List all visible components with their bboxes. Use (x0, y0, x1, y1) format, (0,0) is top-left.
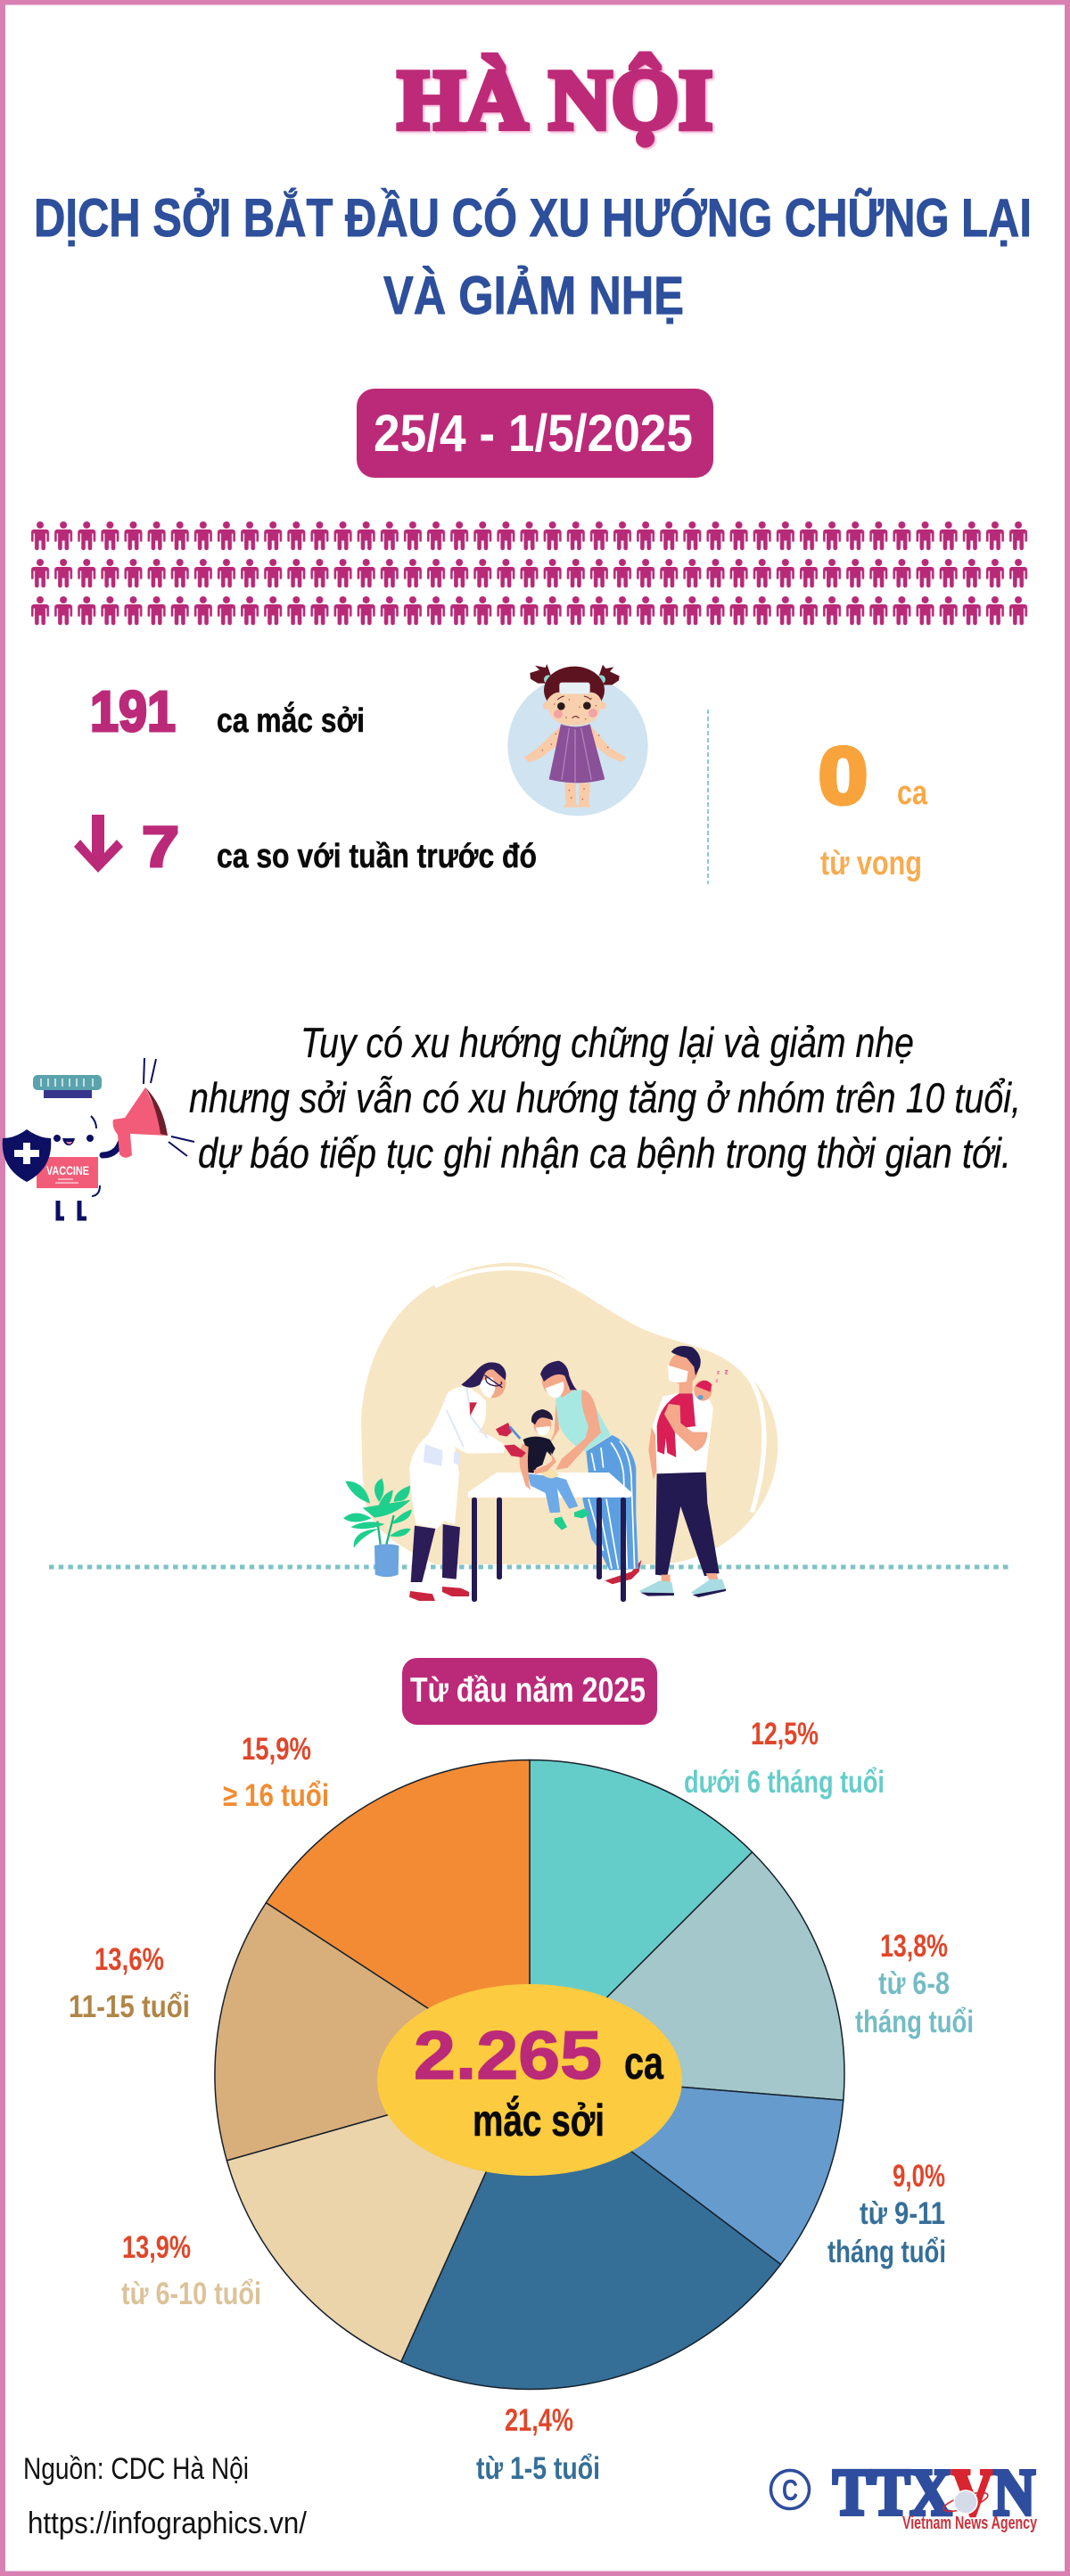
subtitle: VÀ GIẢM NHẸ (383, 266, 684, 325)
date badge (357, 389, 713, 478)
stat: 191 cases: ca mắc sởi (217, 701, 365, 740)
center callout: 2.265 cases: ca (624, 2038, 664, 2089)
label: 9.0%: 9,0% (893, 2159, 945, 2194)
label: 9.0%: tháng tuổi (827, 2235, 946, 2269)
label: 13.8% (855, 1929, 974, 2039)
label: 12.5% (684, 1717, 885, 1800)
label: 9.0%: từ 9-11 (860, 2196, 945, 2231)
stat: 0 deaths: từ vong (820, 845, 922, 882)
background blob (361, 1263, 778, 1564)
label: 15.9%: 15,9% (242, 1732, 311, 1767)
stat: 0 deaths: ca (897, 775, 928, 812)
stat: 0 deaths: 0 (819, 732, 868, 821)
label: 21.4%: từ 1-5 tuổi (476, 2451, 600, 2486)
stat: 191 cases (90, 679, 365, 743)
date badge: 25/4 - 1/5/2025 (374, 405, 693, 463)
father with sleeping baby: z (717, 1370, 720, 1375)
label: 13.8%: từ 6-8 (878, 1966, 950, 2001)
stat: 191 cases: 191 (90, 679, 176, 743)
stat: 0 deaths (819, 732, 928, 882)
label: 15.9%: ≥ 16 tuổi (223, 1778, 329, 1813)
father with sleeping baby: z (716, 1379, 719, 1384)
label: 13.8%: tháng tuổi (855, 2005, 974, 2039)
stat: down 7 cases: ca so với tuần trước đó (217, 838, 537, 875)
heading badge: since start of 2025 (402, 1658, 657, 1725)
child patient (520, 1409, 590, 1530)
slice: 6-10 years 13.9% (226, 2075, 530, 2362)
doctor (409, 1362, 526, 1601)
label: 13.9%: từ 6-10 tuổi (121, 2277, 261, 2311)
label: 13.9% (121, 2230, 261, 2311)
plant (343, 1478, 412, 1577)
divider: dashed vertical line (707, 710, 709, 884)
label: 12.5%: dưới 6 tháng tuổi (684, 1765, 885, 1800)
label: 13.6% (69, 1942, 190, 2024)
slice: 16 and over 15.9% (266, 1760, 530, 2075)
heading badge: since start of 2025: Từ đầu năm 2025 (410, 1671, 646, 1710)
mother arm (556, 1390, 601, 1470)
text block: italic note (189, 1019, 1021, 1177)
label: 9.0% (827, 2159, 946, 2269)
pie chart: cases by age group (215, 1760, 844, 2390)
slice: 11-15 years 13.6% (215, 1903, 530, 2161)
mother lower body (540, 1361, 641, 1584)
slice: under 6 months 12.5% (530, 1760, 753, 2075)
icon: vaccine mascot with megaphone (3, 1058, 194, 1218)
label: 12.5%: 12,5% (751, 1717, 819, 1752)
table (468, 1473, 632, 1602)
center callout: 2.265 cases: 2.265 (414, 2018, 602, 2094)
people pictogram rows (29, 521, 1030, 628)
slice: 9-11 months 9.0% (530, 2075, 844, 2264)
source text: Nguồn: CDC Hà Nội (23, 2452, 249, 2486)
logo: TTXVN: C (782, 2473, 798, 2506)
label: 15.9% (223, 1732, 329, 1813)
subtitle (34, 188, 1032, 325)
father with sleeping baby: z (725, 1367, 728, 1375)
stat: down 7 cases (74, 815, 537, 879)
label: 13.6%: 13,6% (95, 1942, 164, 1977)
stat: down 7 cases: 7 (142, 815, 179, 879)
icon: down arrow (74, 815, 123, 873)
icon: sick child with measles (507, 664, 648, 816)
source text (23, 2452, 308, 2540)
illustration: family vaccination scene (49, 1263, 1012, 1602)
label: 21.4%: 21,4% (505, 2403, 573, 2438)
label: 13.8%: 13,8% (880, 1929, 948, 1964)
label: 21.4% (476, 2403, 600, 2486)
slice: 6-8 months 13.8% (530, 1852, 844, 2100)
father with sleeping baby (639, 1346, 728, 1597)
label: 13.9%: 13,9% (122, 2230, 191, 2265)
label: 13.6%: 11-15 tuổi (69, 1989, 190, 2024)
icon: vaccine mascot with megaphone: VACCINE (46, 1163, 89, 1177)
center callout: 2.265 cases (377, 1984, 682, 2176)
title: HÀ NỘI (398, 53, 712, 147)
text block: italic note: Tuy có xu hướng chững lại và giảm nhẹ (300, 1019, 914, 1066)
logo: TTXVN: TTXVN (833, 2457, 1035, 2530)
source text: https://infographics.vn/ (28, 2506, 308, 2540)
center callout: 2.265 cases: mắc sởi (473, 2096, 605, 2145)
slice: 1-5 years 21.4% (401, 2075, 781, 2390)
